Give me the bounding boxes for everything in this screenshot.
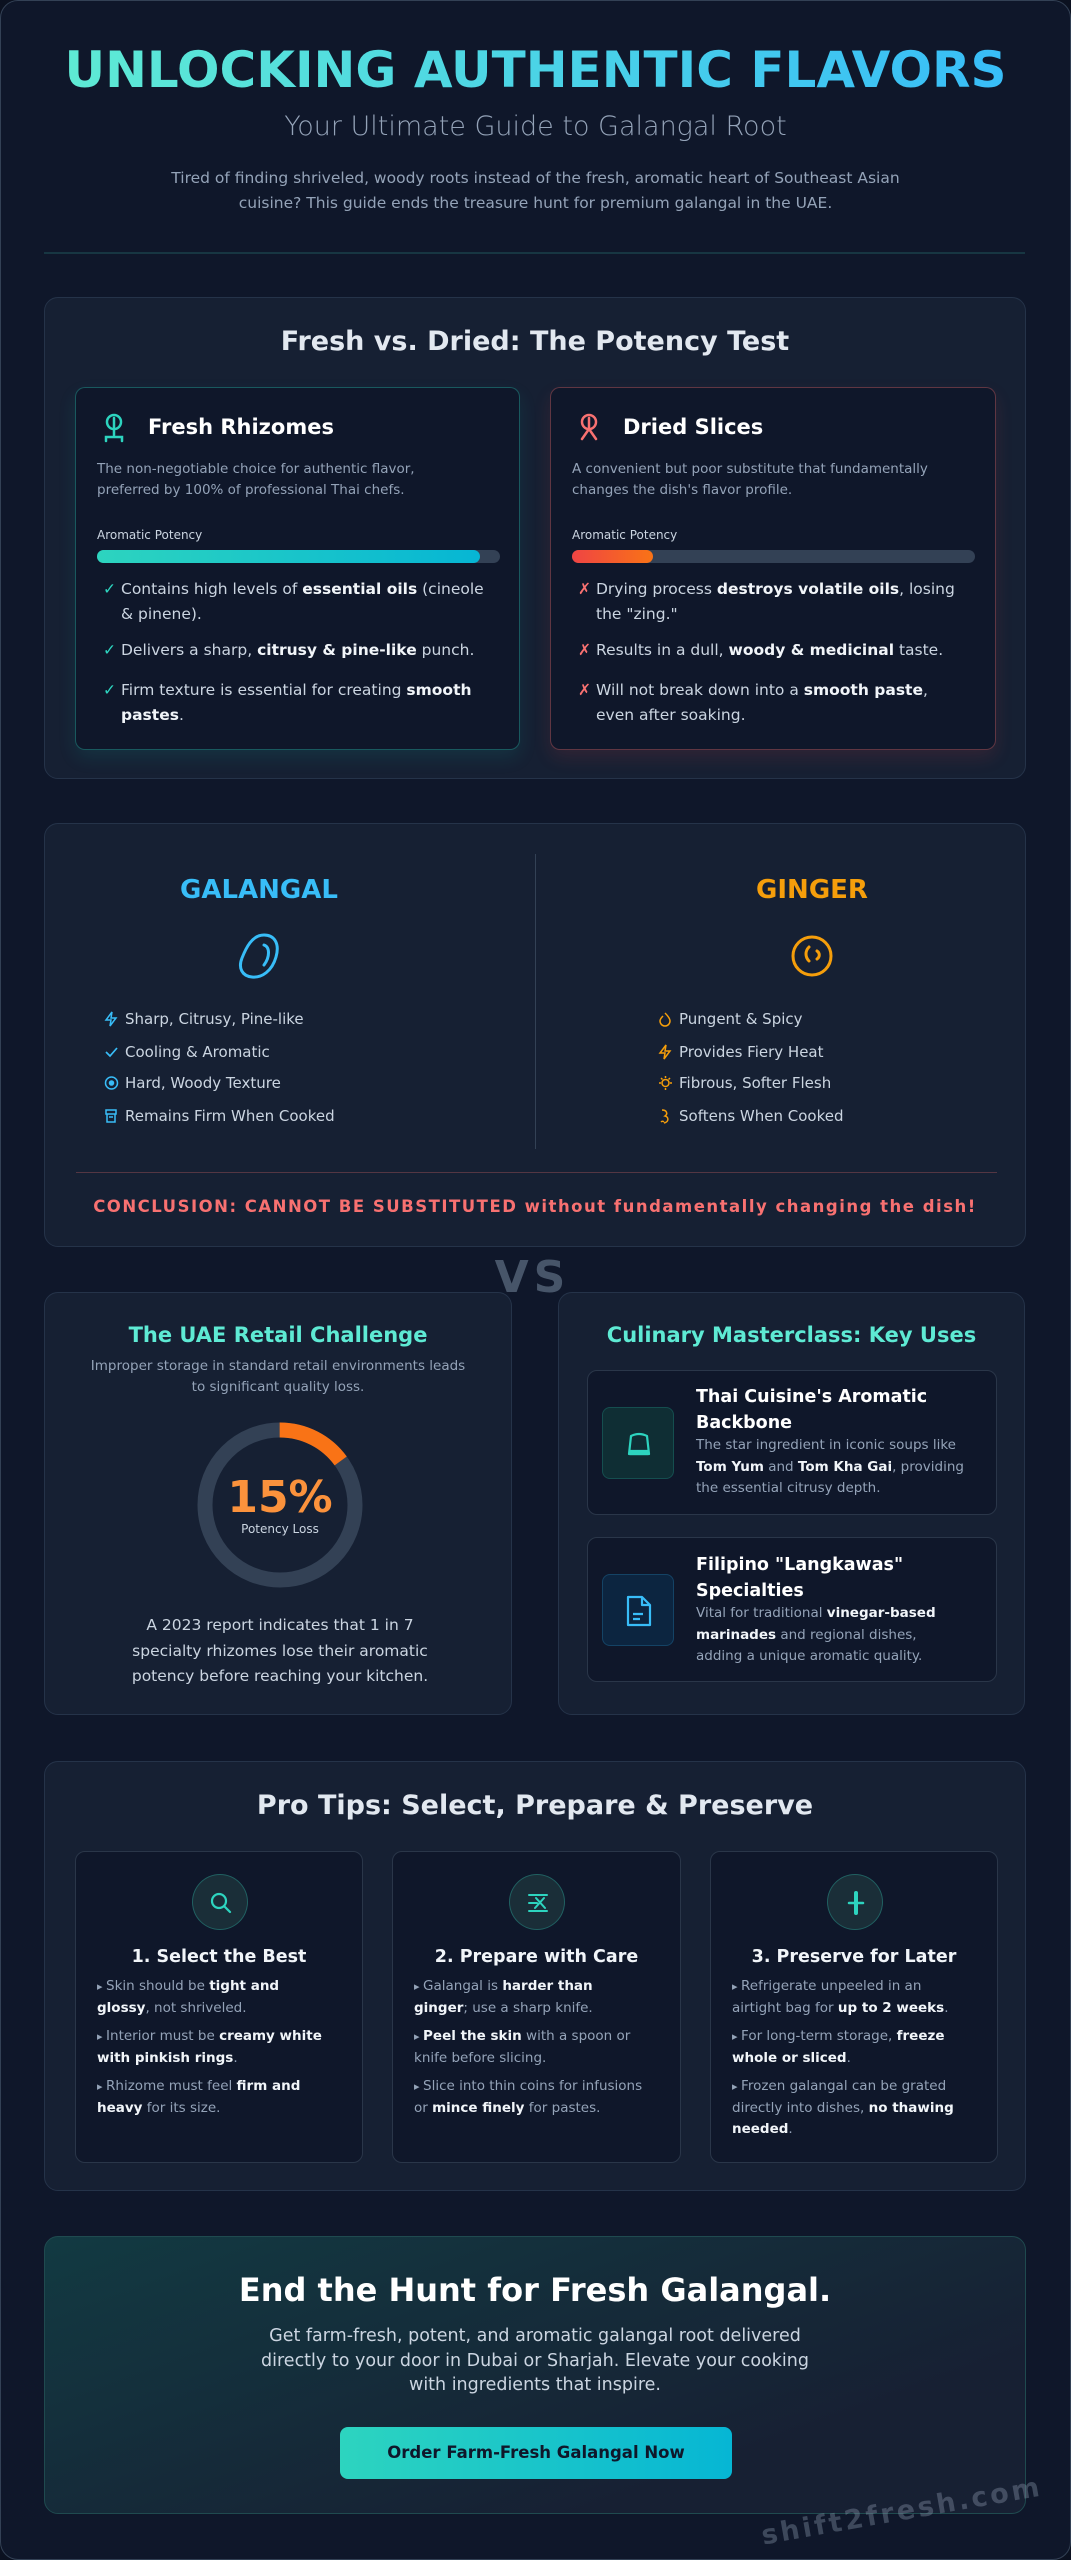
list: dried drawbacks: ✗ [578, 641, 591, 659]
list: ginger traits [658, 1010, 844, 1125]
list: dried drawbacks [578, 580, 955, 724]
bar: dried potency: Aromatic Potency [572, 528, 677, 542]
heading: galangal: GALANGAL [180, 875, 338, 905]
list: dried drawbacks: ✗ [578, 681, 591, 699]
card: prepare [392, 1851, 681, 2163]
card: filipino: Vital for traditional vinegar-based marinades and regional dishes, adding a unique aromatic quality. [696, 1605, 936, 1664]
heading: ginger: GINGER [756, 875, 868, 905]
icon: galangal [238, 934, 279, 979]
heading: dried slices: Dried Slices [623, 415, 763, 439]
heading: key uses: Culinary Masterclass: Key Uses [607, 1323, 976, 1347]
title: prepare: 2. Prepare with Care [435, 1947, 638, 1967]
list: dried drawbacks: Results in a dull, woody & medicinal taste. [596, 641, 943, 659]
panel: culinary masterclass [558, 1292, 1025, 1715]
text: filipino: Filipino "Langkawas" Specialties [696, 1555, 903, 1601]
text: retail desc: Improper storage in standard retail environments leads to significant quality loss. [91, 1358, 465, 1395]
list: fresh benefits: ✓ [103, 641, 116, 659]
list: galangal traits: Hard, Woody Texture [125, 1074, 281, 1092]
vs label: VS [495, 1252, 570, 1303]
card: prepare: Peel the skin with a spoon or knife before slicing. [414, 2028, 630, 2066]
heading: cta: End the Hunt for Fresh Galangal. [239, 2271, 831, 2309]
intro text: Tired of finding shriveled, woody roots instead of the fresh, aromatic heart of Southeast Asian cuisine? This guide ends the treasure hunt for premium galangal in the UAE. [171, 169, 900, 212]
text: dried desc: A convenient but poor substitute that fundamentally changes the dish's flavor profile. [572, 461, 928, 498]
list: dried drawbacks: Drying process destroys volatile oils, losing the "zing." [596, 580, 955, 623]
heading: retail challenge: The UAE Retail Challenge [129, 1323, 427, 1347]
chart: potency loss donut [198, 1422, 362, 1588]
icon: magnifier [192, 1874, 248, 1930]
list: fresh benefits: Firm texture is essential for creating smooth pastes. [121, 681, 472, 724]
title: select: 1. Select the Best [132, 1947, 306, 1967]
panel: fresh vs dried [44, 297, 1026, 779]
card: prepare: Slice into thin coins for infusions or mince finely for pastes. [414, 2078, 642, 2116]
list: preserve tips: Refrigerate unpeeled in an airtight bag for up to 2 weeks. [732, 1978, 948, 2016]
heading: pro tips: Pro Tips: Select, Prepare & Preserve [257, 1790, 813, 1821]
list: galangal traits: Cooling & Aromatic [125, 1043, 270, 1061]
list: ginger traits: Fibrous, Softer Flesh [679, 1074, 831, 1092]
heading: potency test: Fresh vs. Dried: The Potency Test [281, 326, 789, 357]
panel: call to action [44, 2236, 1026, 2514]
icon: knife [509, 1874, 565, 1930]
icon: bowl [602, 1407, 674, 1479]
card: thai cuisine [587, 1370, 997, 1515]
list: select tips: Skin should be tight and glossy, not shriveled. [97, 1978, 279, 2016]
list: galangal traits: Remains Firm When Cooked [125, 1107, 335, 1125]
button: order [340, 2427, 732, 2479]
icon: ginger [792, 936, 832, 976]
button: order: Order Farm-Fresh Galangal Now [387, 2443, 685, 2462]
list: fresh benefits: ✓ [103, 681, 116, 699]
icon: document [602, 1574, 674, 1646]
list: ginger traits: Pungent & Spicy [679, 1010, 803, 1028]
list: dried drawbacks: ✗ [578, 580, 591, 598]
text: fresh desc: The non-negotiable choice for authentic flavor, preferred by 100% of professional Thai chefs. [97, 461, 415, 498]
bar: dried potency [572, 528, 975, 563]
panel: galangal vs ginger [44, 823, 1026, 1247]
panel: UAE retail challenge [44, 1292, 512, 1715]
watermark: shift2fresh.com [759, 2472, 1045, 2551]
text: cta body: Get farm-fresh, potent, and aromatic galangal root delivered directly to your door in Dubai or Sharjah. Elevate your cooking with ingredients that inspire. [261, 2326, 809, 2395]
list: galangal traits [104, 1010, 335, 1125]
text: report stat: A 2023 report indicates that 1 in 7 specialty rhizomes lose their aromatic potency before reaching your kitchen. [132, 1616, 428, 1685]
chart: potency loss donut: Potency Loss [241, 1522, 319, 1536]
list: prepare tips: Galangal is harder than ginger; use a sharp knife. [414, 1978, 593, 2016]
panel: pro tips [44, 1761, 1026, 2191]
card: preserve [710, 1851, 998, 2163]
icon: fresh [104, 414, 124, 442]
heading: fresh rhizomes: Fresh Rhizomes [148, 415, 334, 439]
icon: dried [580, 414, 598, 440]
list: fresh benefits: Delivers a sharp, citrusy & pine-like punch. [121, 641, 474, 659]
title: UNLOCKING AUTHENTIC FLAVORS [64, 41, 1007, 99]
card: preserve: Frozen galangal can be grated directly into dishes, no thawing needed. [732, 2078, 954, 2137]
chart: potency loss donut: 15% [227, 1472, 333, 1523]
title: preserve: 3. Preserve for Later [752, 1947, 956, 1967]
list: ginger traits: Provides Fiery Heat [679, 1043, 824, 1061]
list: fresh benefits: Contains high levels of essential oils (cineole & pinene). [121, 580, 484, 623]
subtitle: Your Ultimate Guide to Galangal Root [284, 111, 787, 142]
list: fresh benefits [103, 580, 484, 724]
list: ginger traits: Softens When Cooked [679, 1107, 844, 1125]
card: filipino [587, 1537, 997, 1682]
card: thai cuisine: The star ingredient in iconic soups like Tom Yum and Tom Kha Gai, providing the essential citrusy depth. [696, 1437, 964, 1496]
card: dried slices [550, 387, 996, 750]
conclusion: CONCLUSION: CANNOT BE SUBSTITUTED without fundamentally changing the dish! [93, 1197, 977, 1216]
list: fresh benefits: ✓ [103, 580, 116, 598]
bar: fresh potency [97, 528, 500, 563]
icon: thermometer [827, 1874, 883, 1930]
card: select: Interior must be creamy white with pinkish rings. [97, 2028, 322, 2066]
card: select [75, 1851, 363, 2163]
list: galangal traits: Sharp, Citrusy, Pine-like [125, 1010, 304, 1028]
card: fresh rhizomes [75, 387, 520, 750]
bar: fresh potency: Aromatic Potency [97, 528, 202, 542]
text: thai: Thai Cuisine's Aromatic Backbone [696, 1387, 927, 1433]
list: dried drawbacks: Will not break down into a smooth paste, even after soaking. [596, 681, 928, 724]
card: select: Rhizome must feel firm and heavy for its size. [97, 2078, 300, 2116]
card: preserve: For long-term storage, freeze whole or sliced. [732, 2028, 945, 2066]
